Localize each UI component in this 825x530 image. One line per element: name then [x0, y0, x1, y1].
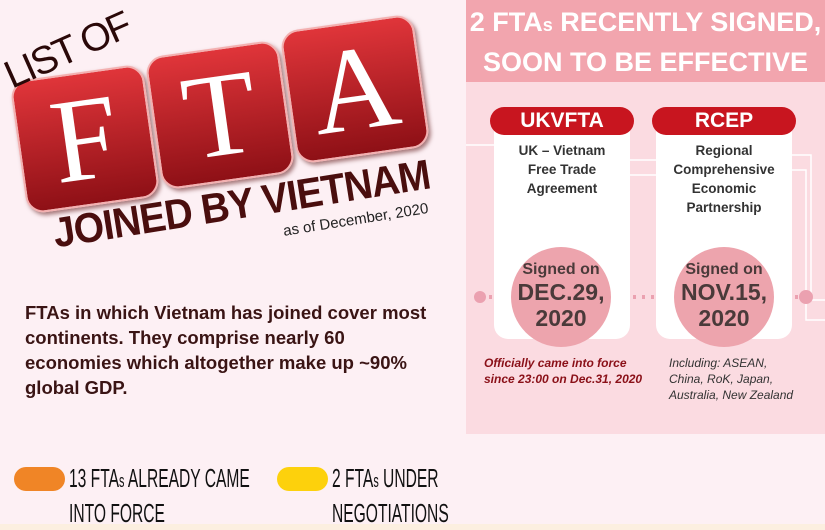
card: RCEP: RCEP	[695, 109, 753, 132]
title: T	[174, 44, 265, 185]
heading: 2 FTAs RECENTLY SIGNED,	[470, 7, 821, 37]
legend: negotiations: 2 FTAs UNDER	[332, 463, 439, 493]
connector lines	[466, 144, 825, 321]
note: UKVFTA: since 23:00 on Dec.31, 2020	[484, 372, 642, 386]
intro text: FTAs in which Vietnam has joined cover most continents. They comprise nearly 60 economies which altogether make up ~90% global GDP.	[25, 302, 426, 398]
card: RCEP: Comprehensive	[673, 162, 775, 177]
note: RCEP: Australia, New Zealand	[669, 388, 793, 402]
card: RCEP: NOV.15,	[681, 279, 767, 305]
note: RCEP	[668, 356, 794, 402]
note: UKVFTA: Officially came into force	[484, 356, 626, 370]
card: RCEP: Partnership	[686, 200, 762, 215]
LIST OF: LIST OF	[0, 4, 137, 97]
legend: in force: INTO FORCE	[69, 498, 165, 528]
heading	[466, 0, 825, 82]
legend: negotiations	[277, 463, 449, 528]
card: UKVFTA: UKVFTA	[520, 109, 604, 132]
title	[0, 4, 434, 256]
card: RCEP: Regional	[695, 143, 752, 158]
card: UKVFTA	[494, 107, 630, 339]
legend: in force: 13 FTAs ALREADY CAME	[69, 463, 250, 493]
card: UKVFTA: Agreement	[527, 181, 597, 196]
title: A	[303, 17, 407, 160]
FTA boxes: F	[43, 68, 127, 209]
card: RCEP: 2020	[698, 305, 750, 331]
legend: in force	[14, 463, 250, 528]
date: as of December, 2020	[282, 200, 430, 240]
FTA boxes	[9, 63, 161, 215]
card: UKVFTA: 2020	[535, 305, 587, 331]
card: RCEP	[656, 107, 792, 339]
note: RCEP: Including: ASEAN,	[669, 356, 767, 370]
card: RCEP: Signed on	[685, 261, 763, 278]
legend: negotiations: NEGOTIATIONS	[332, 498, 449, 528]
note: RCEP: China, RoK, Japan,	[669, 372, 773, 386]
JOINED BY VIETNAM: JOINED BY VIETNAM	[50, 150, 433, 256]
card: UKVFTA: UK – Vietnam	[519, 143, 605, 158]
card: UKVFTA: DEC.29,	[518, 279, 604, 305]
note: UKVFTA	[484, 356, 642, 386]
panel: recently signed	[466, 0, 825, 434]
card: RCEP: Economic	[692, 181, 756, 196]
heading: SOON TO BE EFFECTIVE	[483, 47, 808, 77]
card: UKVFTA: Free Trade	[528, 162, 596, 177]
card: UKVFTA: Signed on	[522, 261, 600, 278]
